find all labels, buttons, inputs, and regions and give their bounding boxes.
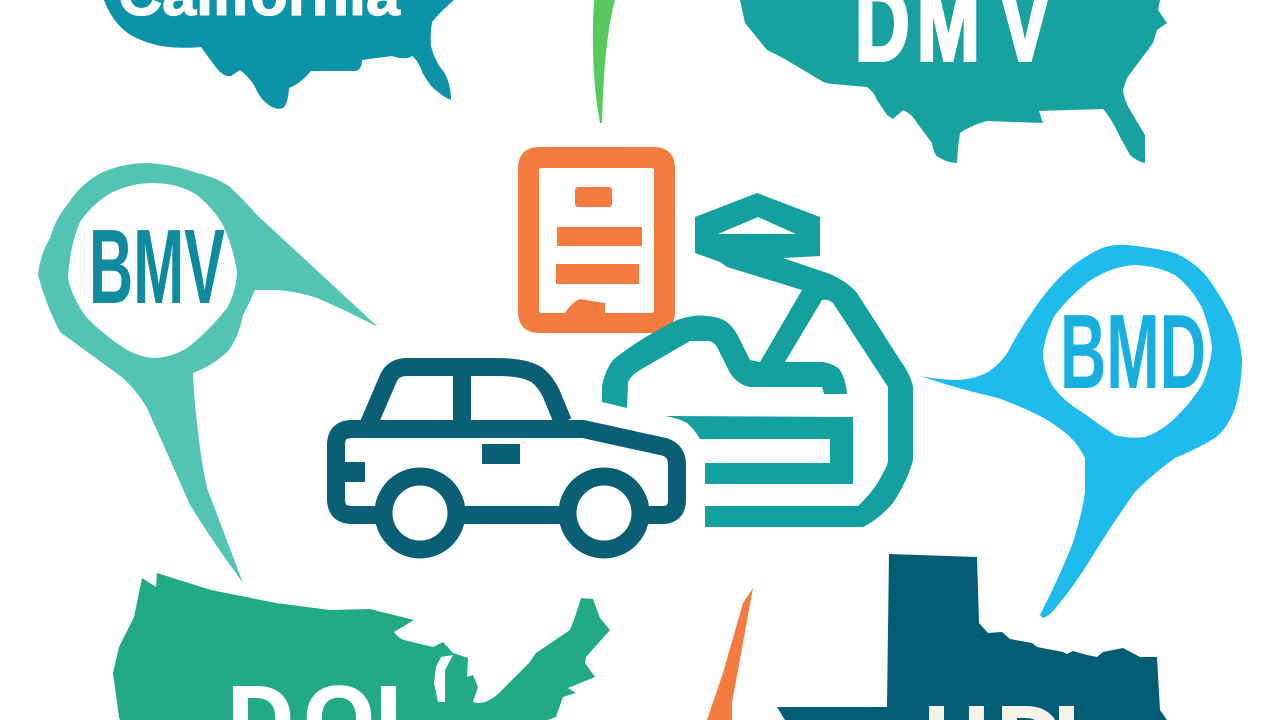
car door handle xyxy=(482,444,520,464)
car rear bumper xyxy=(345,462,365,482)
map: Texas agency shape xyxy=(777,554,1167,720)
document heading bar xyxy=(575,187,612,207)
icon: dark teal car xyxy=(336,367,677,550)
label: BMV: BMV xyxy=(89,208,225,326)
document line one xyxy=(557,227,642,246)
map: DMV agency shape xyxy=(740,0,1167,163)
document line two xyxy=(556,264,639,284)
icon: orange document xyxy=(518,147,675,333)
pin: BMD xyxy=(920,245,1242,618)
pointer: orange tail bottom xyxy=(707,588,753,720)
stacked lines below officer xyxy=(665,416,853,484)
pin: BMV xyxy=(38,163,378,583)
map: DOL agency shape xyxy=(113,573,610,720)
icon: teal officer with hat xyxy=(602,193,913,527)
map: California agency shape xyxy=(104,0,454,109)
sliver across the V xyxy=(985,12,1009,53)
pointer: green tail top xyxy=(593,0,615,123)
